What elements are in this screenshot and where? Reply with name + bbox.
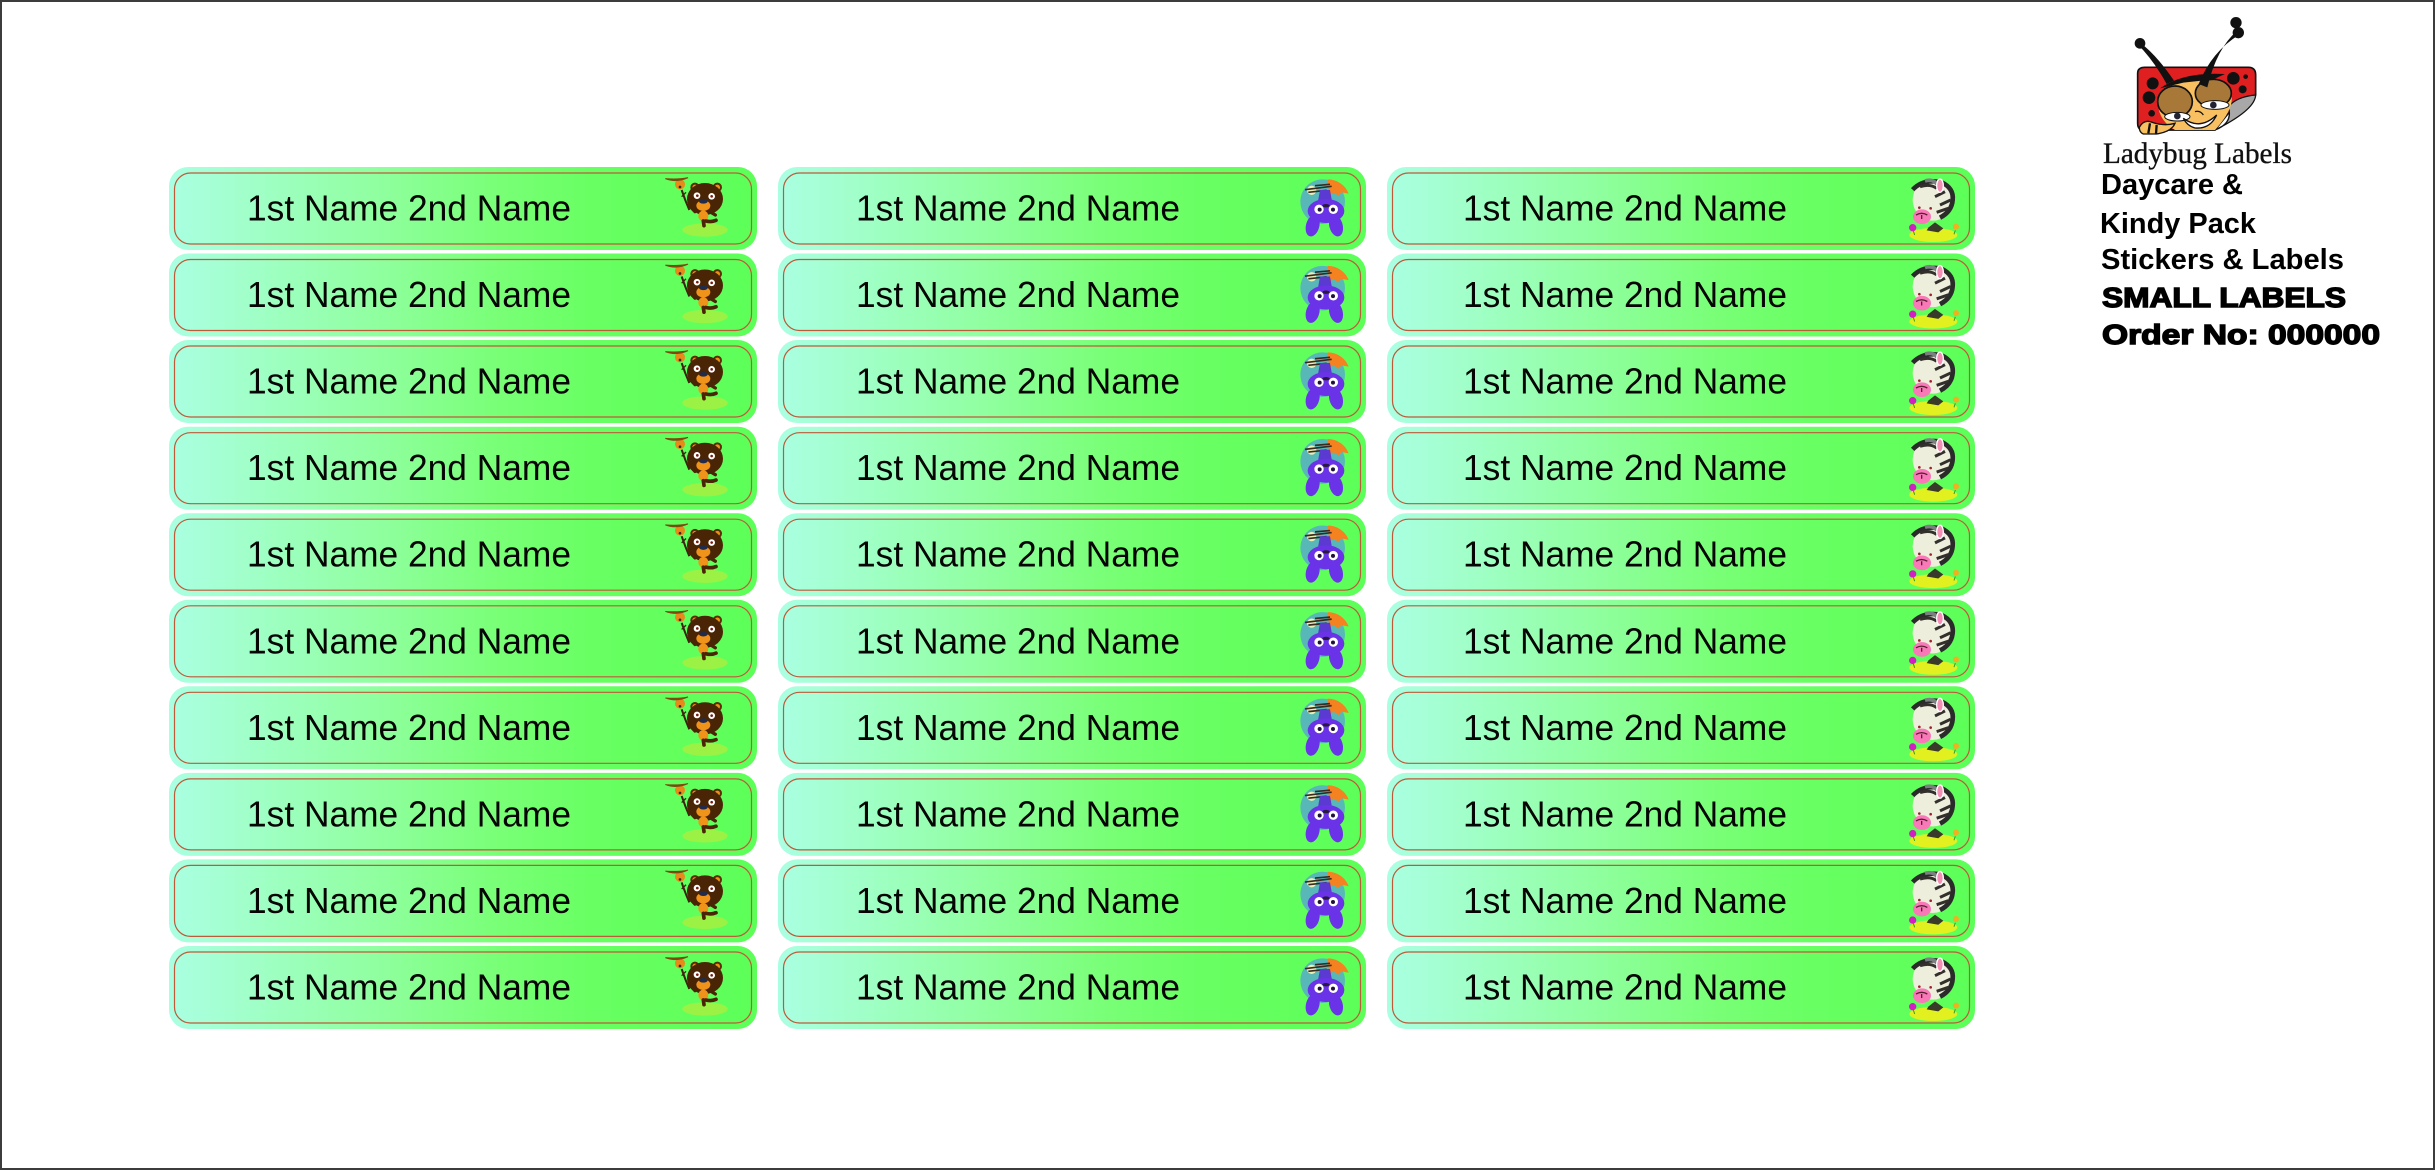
label: [778, 600, 1366, 683]
label: [169, 600, 757, 683]
column 3: zebra labels: [1387, 167, 1975, 1029]
icon: purple creature: [1300, 958, 1349, 1017]
label: [169, 946, 757, 1029]
icon: bear: [665, 697, 728, 756]
small labels line: SMALL LABELS: [2102, 282, 2346, 313]
heading: kindy pack: Kindy Pack: [2100, 208, 2256, 240]
label: [169, 254, 757, 336]
product details text block: [2100, 169, 2380, 350]
icon: bear: [665, 784, 728, 843]
icon: purple creature: [1300, 266, 1349, 325]
label: [778, 340, 1366, 423]
icon: bear: [665, 264, 728, 323]
name: 1st Name 2nd Name: [1463, 880, 1787, 921]
icon: purple creature: [1300, 439, 1349, 498]
name: 1st Name 2nd Name: [247, 534, 571, 575]
heading: stickers and labels: Stickers & Labels: [2101, 244, 2344, 276]
icon: bear: [665, 610, 728, 669]
name: 1st Name 2nd Name: [247, 360, 571, 402]
icon: bear: [665, 178, 728, 237]
icon: zebra: [1909, 958, 1959, 1021]
icon: zebra: [1909, 265, 1959, 328]
name: 1st Name 2nd Name: [856, 966, 1180, 1008]
label: [1387, 340, 1975, 423]
name: 1st Name 2nd Name: [856, 707, 1180, 748]
name: 1st Name 2nd Name: [856, 188, 1180, 228]
label: [778, 773, 1366, 856]
label: [169, 340, 757, 423]
label: [1387, 427, 1975, 510]
name: 1st Name 2nd Name: [247, 188, 571, 228]
name: 1st Name 2nd Name: [856, 447, 1180, 488]
icon: ladybug logo: [2135, 17, 2256, 134]
order number: Order No: 000000: [2102, 319, 2380, 350]
icon: zebra: [1909, 179, 1959, 242]
heading: daycare: Daycare &: [2101, 169, 2243, 201]
icon: zebra: [1909, 612, 1959, 675]
name: 1st Name 2nd Name: [247, 793, 571, 834]
icon: bear: [665, 870, 728, 929]
label: [778, 946, 1366, 1029]
label: [169, 859, 757, 942]
name: 1st Name 2nd Name: [1463, 447, 1787, 488]
name: 1st Name 2nd Name: [1463, 360, 1787, 402]
icon: purple creature: [1300, 612, 1349, 671]
label: [1387, 773, 1975, 856]
name: 1st Name 2nd Name: [1463, 534, 1787, 575]
label: [1387, 254, 1975, 336]
label: [169, 167, 757, 250]
icon: bear: [665, 351, 728, 410]
name: 1st Name 2nd Name: [856, 793, 1180, 834]
label: [778, 427, 1366, 510]
name: 1st Name 2nd Name: [247, 447, 571, 488]
name: 1st Name 2nd Name: [1463, 793, 1787, 834]
name: 1st Name 2nd Name: [247, 274, 571, 315]
icon: purple creature: [1300, 179, 1349, 238]
label: [1387, 513, 1975, 596]
icon: zebra: [1909, 871, 1959, 934]
label: [169, 427, 757, 510]
label: [1387, 859, 1975, 942]
label: [1387, 167, 1975, 250]
label: [778, 859, 1366, 942]
icon: zebra: [1909, 352, 1959, 415]
icon: purple creature: [1300, 699, 1349, 757]
name: 1st Name 2nd Name: [247, 707, 571, 748]
name: 1st Name 2nd Name: [856, 274, 1180, 315]
name: 1st Name 2nd Name: [1463, 188, 1787, 228]
name: 1st Name 2nd Name: [247, 880, 571, 921]
name: 1st Name 2nd Name: [1463, 966, 1787, 1008]
label: [778, 167, 1366, 250]
icon: purple creature: [1300, 785, 1349, 844]
name: 1st Name 2nd Name: [247, 966, 571, 1008]
name: 1st Name 2nd Name: [856, 880, 1180, 921]
column 1: bear labels: [169, 167, 757, 1029]
label: [169, 513, 757, 596]
icon: zebra: [1909, 698, 1959, 761]
label: [1387, 946, 1975, 1029]
label: [169, 686, 757, 769]
icon: zebra: [1909, 525, 1959, 588]
brand name: Ladybug Labels: [2103, 137, 2292, 170]
icon: purple creature: [1300, 526, 1349, 584]
column 2: purple creature labels: [778, 167, 1366, 1029]
name: 1st Name 2nd Name: [856, 360, 1180, 402]
name: 1st Name 2nd Name: [1463, 274, 1787, 315]
label: [169, 773, 757, 856]
name: 1st Name 2nd Name: [1463, 620, 1787, 661]
icon: bear: [665, 957, 728, 1016]
icon: purple creature: [1300, 872, 1349, 930]
label: [1387, 686, 1975, 769]
name: 1st Name 2nd Name: [247, 620, 571, 661]
name: 1st Name 2nd Name: [856, 620, 1180, 661]
label: [778, 513, 1366, 596]
name: 1st Name 2nd Name: [1463, 707, 1787, 748]
icon: bear: [665, 437, 728, 496]
icon: purple creature: [1300, 352, 1349, 411]
name: 1st Name 2nd Name: [856, 534, 1180, 575]
label: [1387, 600, 1975, 683]
icon: zebra: [1909, 439, 1959, 502]
label: [778, 686, 1366, 769]
icon: bear: [665, 524, 728, 583]
icon: zebra: [1909, 785, 1959, 848]
label: [778, 254, 1366, 336]
